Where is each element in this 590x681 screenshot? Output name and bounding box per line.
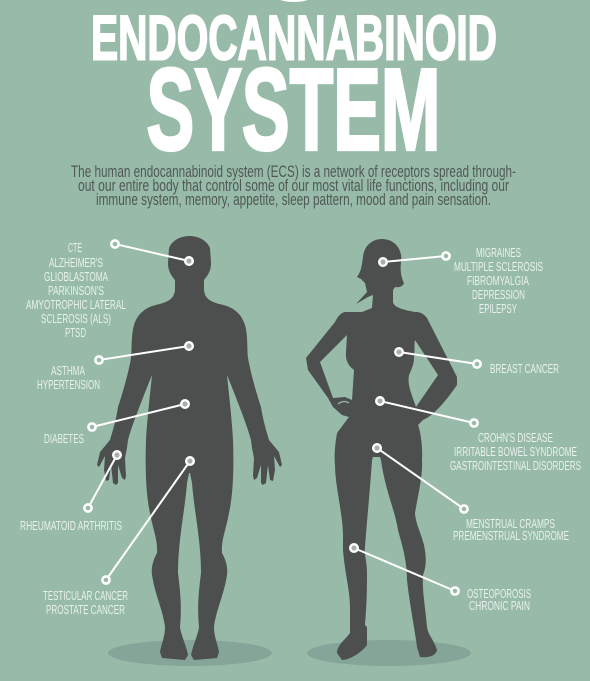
- female silhouette: [306, 239, 457, 660]
- male silhouette: [97, 236, 282, 660]
- labels: brain conditions (male): CTE: [68, 240, 82, 255]
- labels: bone and pain conditions: OSTEOPOROSIS: [467, 586, 531, 601]
- labels: brain conditions (female): EPILEPSY: [479, 301, 517, 316]
- labels: bone and pain conditions: CHRONIC PAIN: [469, 598, 530, 613]
- connectors: female: [350, 252, 481, 595]
- labels: male reproductive conditions: PROSTATE CANCER: [46, 602, 125, 617]
- labels: male reproductive conditions: [43, 588, 128, 617]
- ground shadow: male: [108, 640, 272, 666]
- top icon arc: [277, 0, 311, 2]
- intro text: [71, 163, 516, 209]
- labels: male reproductive conditions: TESTICULAR CANCER: [43, 588, 128, 603]
- labels: menstrual conditions: [453, 516, 569, 543]
- label: diabetes: DIABETES: [44, 431, 84, 446]
- labels: brain conditions (male): PTSD: [65, 325, 86, 340]
- labels: digestive conditions: [450, 430, 581, 473]
- labels: brain conditions (male): ALZHEIMER'S: [49, 255, 103, 270]
- labels: brain conditions (male): PARKINSON'S: [48, 283, 104, 298]
- title: [91, 4, 497, 174]
- labels: chest conditions (male): ASTHMA: [51, 363, 85, 378]
- label: rheumatoid arthritis: RHEUMATOID ARTHRITIS: [20, 518, 122, 533]
- labels: brain conditions (male): SCLEROSIS (ALS): [41, 311, 111, 326]
- connectors: male: [84, 240, 194, 584]
- labels: brain conditions (male): GLIOBLASTOMA: [44, 269, 108, 284]
- labels: brain conditions (male): [26, 240, 126, 340]
- labels: chest conditions (male): HYPERTENSION: [37, 377, 100, 392]
- labels: brain conditions (female): [454, 245, 543, 316]
- labels: brain conditions (female): MIGRAINES: [476, 245, 521, 260]
- labels: brain conditions (male): AMYOTROPHIC LATERAL: [26, 297, 126, 312]
- ground shadow: female: [307, 640, 471, 666]
- labels: chest conditions (male): [37, 363, 100, 392]
- labels: bone and pain conditions: [467, 586, 531, 613]
- labels: brain conditions (female): FIBROMYALGIA: [467, 273, 529, 288]
- labels: brain conditions (female): DEPRESSION: [472, 287, 525, 302]
